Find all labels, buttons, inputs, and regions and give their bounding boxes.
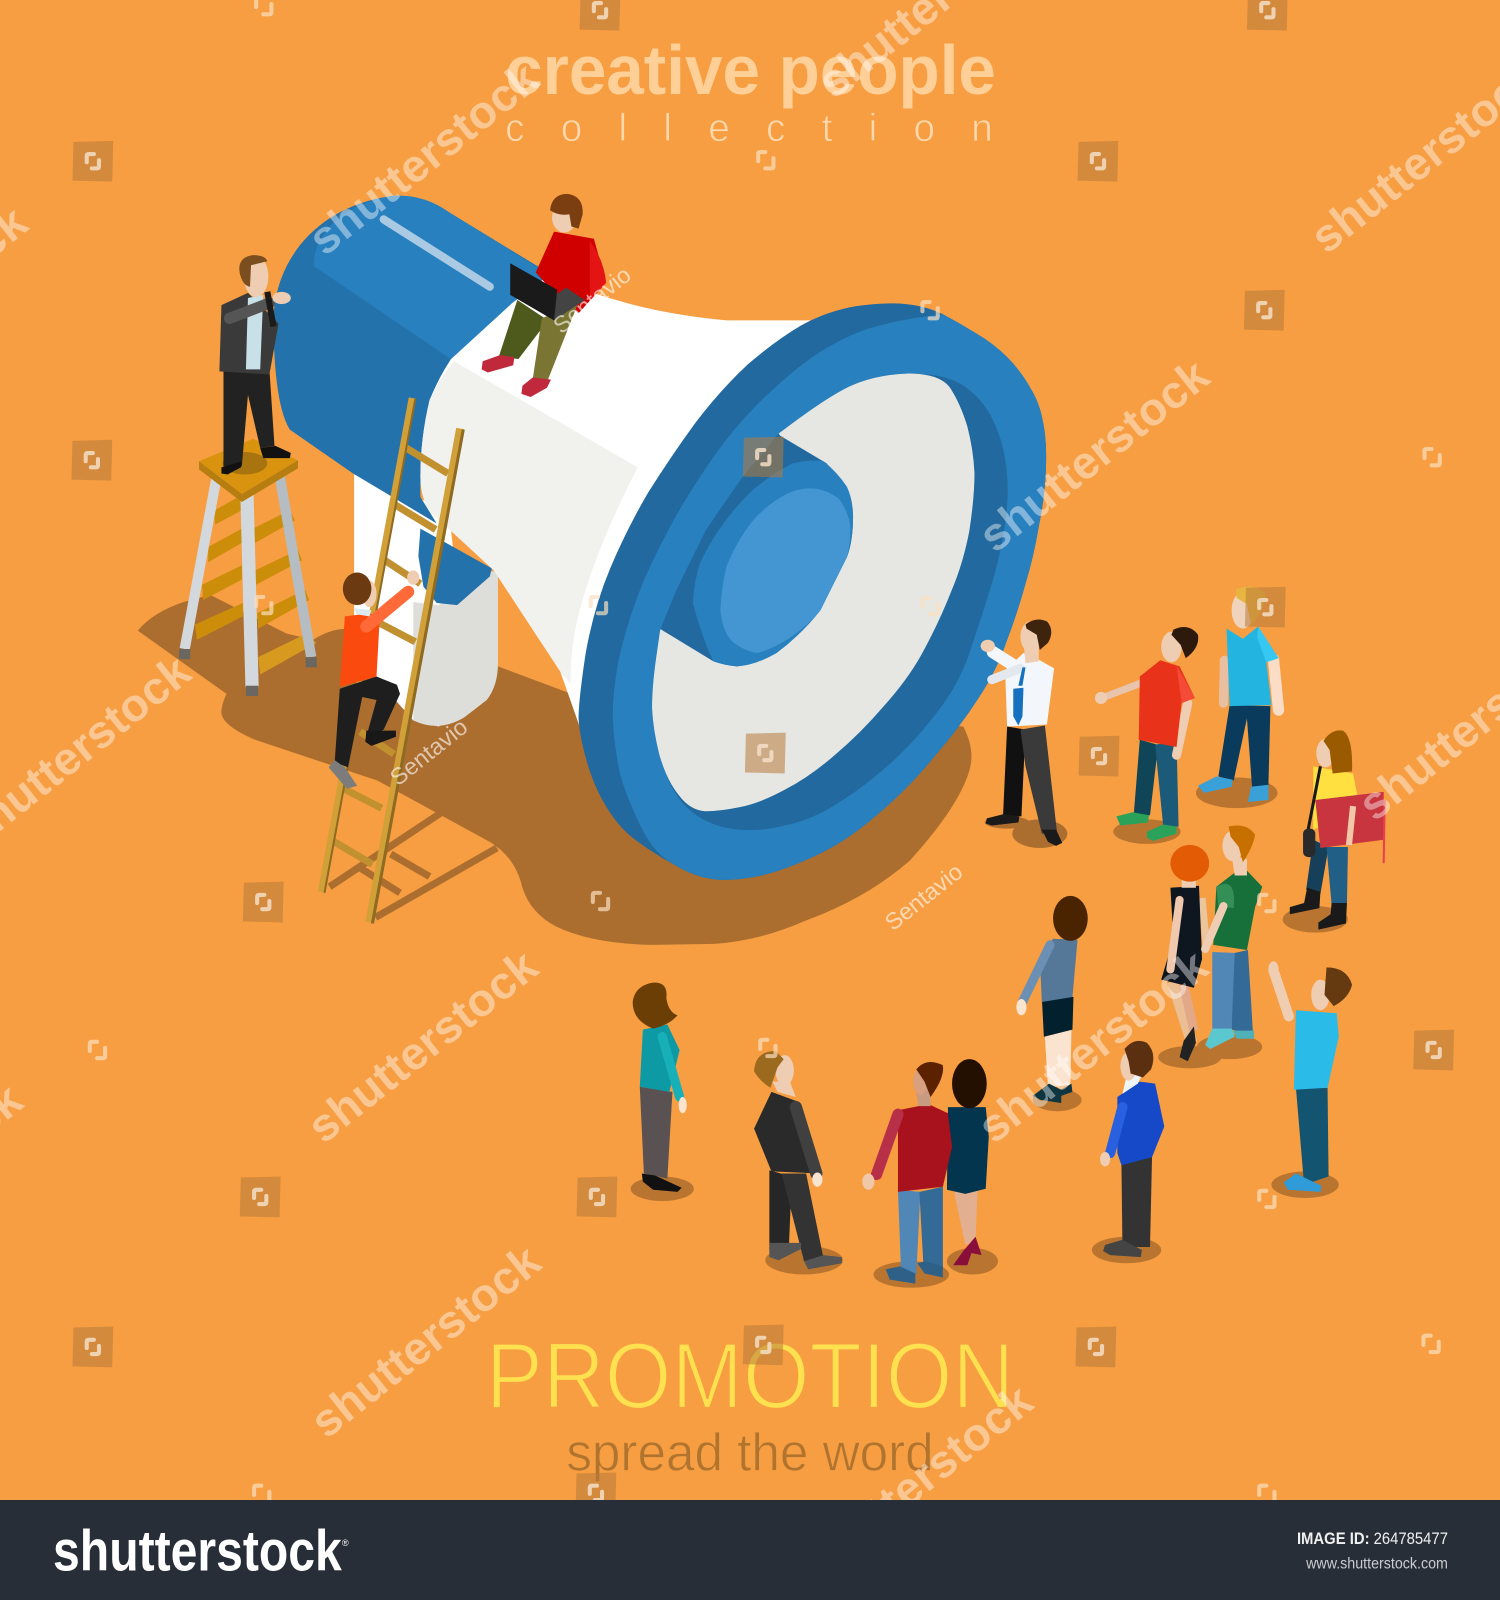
ladder steps xyxy=(195,495,316,674)
horn interior xyxy=(652,373,974,811)
handle xyxy=(354,473,498,727)
ladder rails xyxy=(321,398,463,923)
man in red t-shirt xyxy=(1095,627,1198,844)
footer bar xyxy=(0,1500,1500,1600)
rim inner wall xyxy=(652,373,1008,830)
ladder platform xyxy=(199,439,298,502)
man in white shirt and blue tie xyxy=(981,619,1067,848)
ladder rungs xyxy=(333,448,448,864)
title: PROMOTION: PROMOTION xyxy=(486,1323,1014,1428)
ladder legs xyxy=(185,476,311,696)
watermark text: shutterstock xyxy=(969,348,1219,562)
man in blue t-shirt waving xyxy=(1268,961,1352,1198)
woman in black dress with orange hair xyxy=(1158,845,1221,1068)
crowd xyxy=(631,587,1385,1288)
subheading: collection: collection xyxy=(505,107,993,150)
rear cylinder xyxy=(273,196,556,523)
watermark text: shutterstock xyxy=(300,1234,550,1448)
driver cone xyxy=(661,435,853,666)
woman in dark teal dress xyxy=(947,1059,998,1274)
footer logo: shutterstock xyxy=(53,1519,342,1583)
watermark: Sentavio xyxy=(385,261,967,936)
heading: creative people: creative people xyxy=(505,31,996,109)
woman in teal top xyxy=(631,983,694,1201)
footer registered mark: ® xyxy=(342,1538,349,1548)
watermark text: shutterstock xyxy=(968,939,1218,1153)
watermark: Sentavio: Sentavio xyxy=(548,261,636,339)
man in green t-shirt xyxy=(1197,826,1262,1059)
megaphone xyxy=(273,196,1046,880)
footer image id: IMAGE ID: 264785477 xyxy=(1297,1530,1448,1548)
woman in blue jacket and black skirt xyxy=(1016,896,1088,1111)
watermark text: shutterstock xyxy=(297,939,547,1153)
man in suit on stepladder xyxy=(219,255,291,474)
watermark: Sentavio: Sentavio xyxy=(880,858,967,936)
rim front xyxy=(613,314,1046,880)
wooden ladder xyxy=(321,398,463,923)
handle socket xyxy=(418,529,492,605)
man in red sweater xyxy=(862,1062,952,1288)
stepladder xyxy=(185,439,316,696)
woman with red book xyxy=(1283,730,1385,933)
rim outer xyxy=(579,303,1046,880)
watermark text: shutterstock xyxy=(298,51,548,265)
blond man in blue t-shirt xyxy=(1196,587,1279,808)
man in orange on ladder xyxy=(329,570,419,789)
watermark: Sentavio: Sentavio xyxy=(385,713,473,791)
subtitle: spread the word: spread the word xyxy=(566,1423,934,1482)
footer website: www.shutterstock.com xyxy=(1305,1555,1448,1572)
ground shadow of the megaphone and steps xyxy=(138,595,971,945)
white horn xyxy=(420,273,810,727)
man in black suit xyxy=(754,1051,843,1274)
man in blue sweater xyxy=(1092,1041,1164,1263)
seated man with laptop xyxy=(482,194,606,397)
watermark text: shutterstock xyxy=(792,1374,1042,1587)
